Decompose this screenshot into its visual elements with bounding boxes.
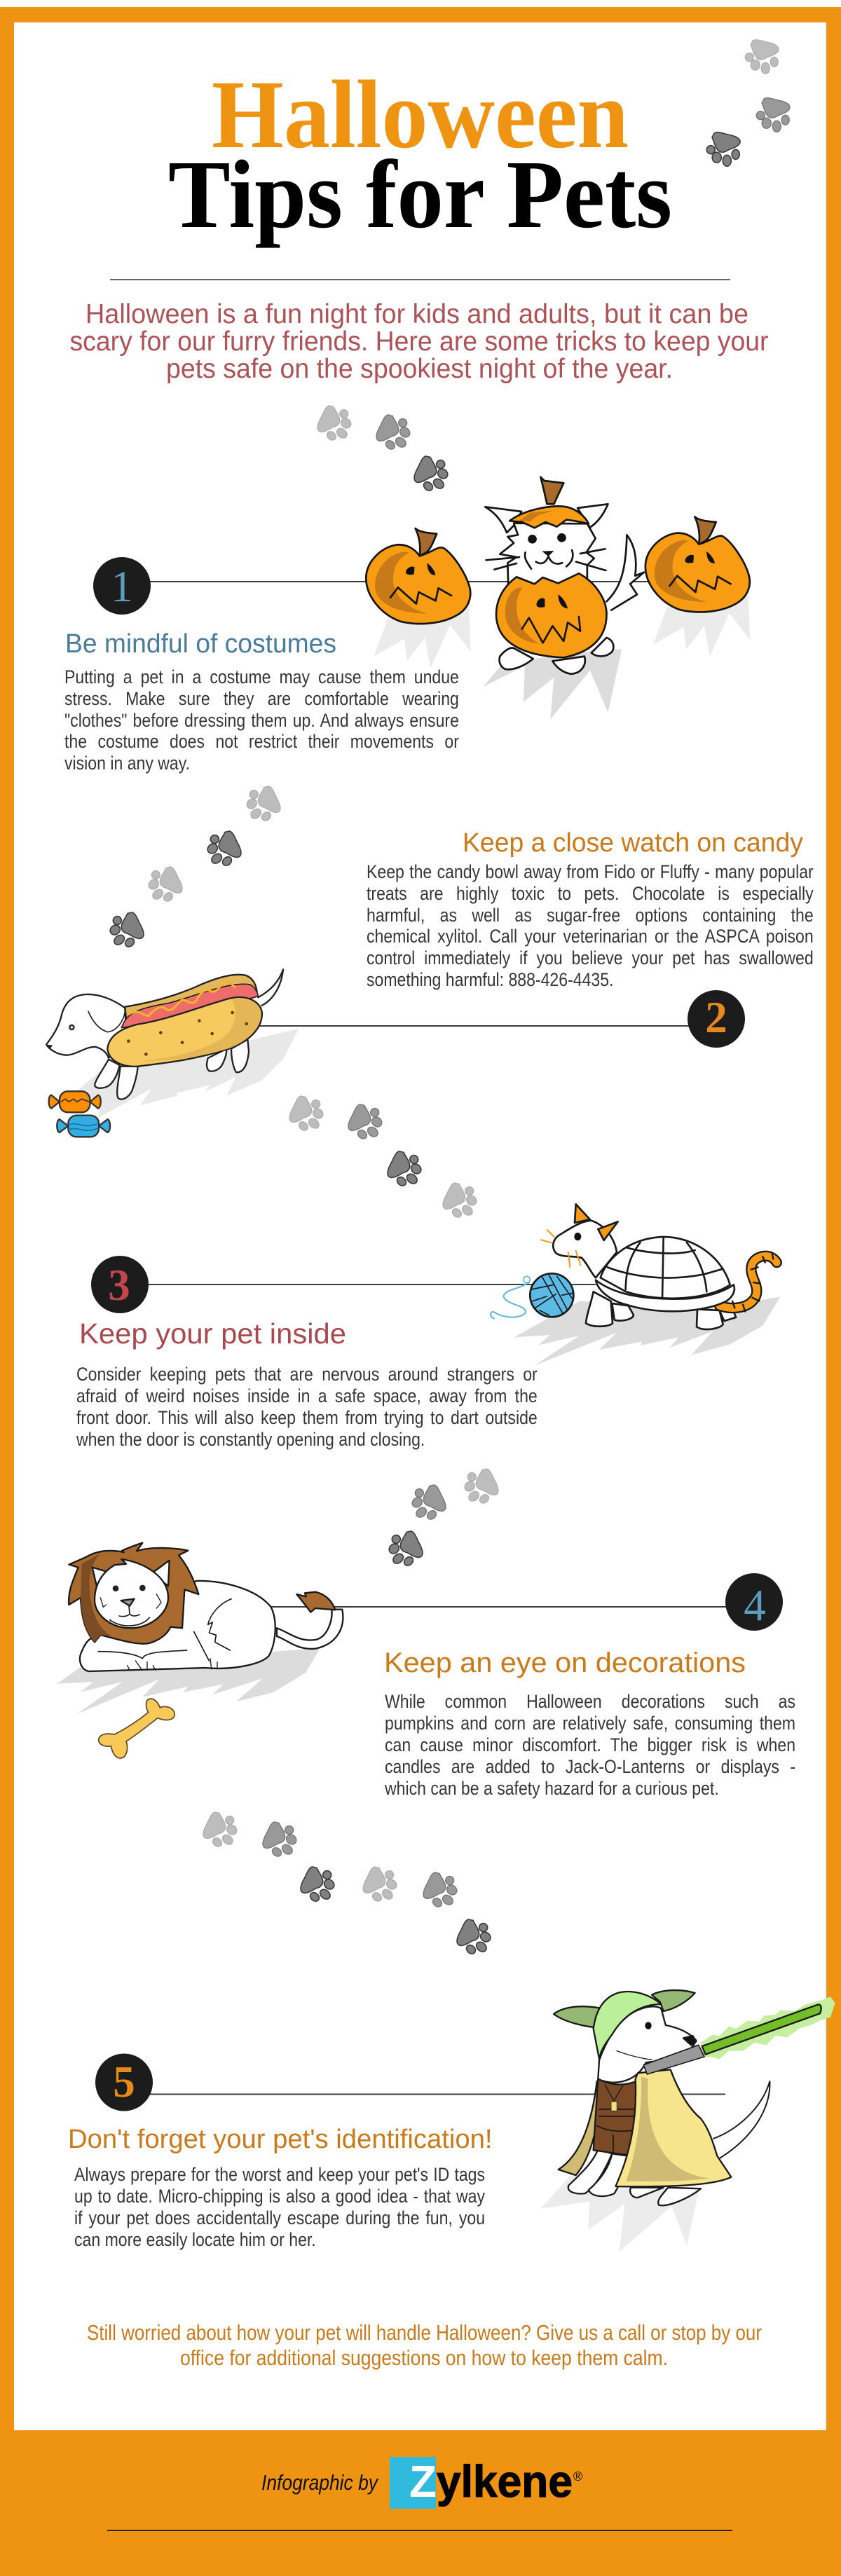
text: decorations paragraph (385, 1691, 795, 1799)
panel: section 3 keep inside (76, 1203, 782, 1450)
text: keep inside paragraph: afraid of weird noises inside in a safe space, away from the (76, 1385, 538, 1406)
panel: header (70, 61, 769, 384)
text: decorations paragraph: candles are added to Jack-O-Lanterns or displays - (385, 1756, 795, 1777)
heading: Be mindful of costumes (65, 629, 336, 659)
logo: Zylkene: ylkene (437, 2456, 573, 2507)
text: identification paragraph: up to date. Micro-chipping is also a good idea - that way (74, 2186, 485, 2207)
closing call to action: office for additional suggestions on how to keep them calm. (180, 2345, 668, 2370)
number badge 1 (93, 557, 151, 615)
text: candy paragraph: Keep the candy bowl away from Fido or Fluffy - many popular (367, 861, 814, 882)
text: costumes paragraph: stress. Make sure they are comfortable wearing (64, 688, 459, 709)
text: decorations paragraph: pumpkins and corn are relatively safe, consuming them (385, 1713, 795, 1734)
text: costumes paragraph: Putting a pet in a costume may cause them undue (64, 666, 459, 687)
closing call to action (87, 2320, 762, 2370)
heading: Don't forget your pet's identification! (68, 2125, 493, 2154)
paw prints: trail to section 2 (102, 780, 286, 954)
panel: section 4 decorations (57, 1542, 795, 1799)
text: identification paragraph: if your pet does accidentally escape during the fun, you (74, 2207, 485, 2228)
credit text: Infographic by (261, 2470, 379, 2495)
number badge 2 (688, 990, 745, 1048)
illustration: dog in jedi costume (541, 1990, 835, 2252)
title (168, 61, 672, 249)
title: Tips for Pets (168, 141, 672, 249)
text: decorations paragraph: can cause minor discomfort. The bigger risk is when (385, 1734, 795, 1755)
text: costumes paragraph: vision in any way. (64, 753, 190, 774)
number badge 5 (95, 2053, 153, 2111)
heading: Keep a close watch on candy (463, 828, 803, 858)
number badge 2: 2 (705, 993, 727, 1042)
paw prints: top corner (706, 40, 790, 166)
illustration: dog in hot dog costume (46, 969, 299, 1118)
text: identification paragraph: Always prepare for the worst and keep your pet's ID tags (74, 2164, 485, 2185)
paw prints: trail to section 5 (198, 1806, 499, 1961)
intro text: pets safe on the spookiest night of the year. (166, 354, 673, 384)
text: candy paragraph: something harmful: 888-426-4435. (367, 969, 613, 990)
heading: Keep an eye on decorations (384, 1647, 746, 1678)
paw prints: trail to section 3 (284, 1090, 485, 1224)
panel: section 5 identification (68, 1989, 835, 2252)
text: costumes paragraph: "clothes" before dressing them up. And always ensure (64, 710, 459, 731)
text: candy paragraph: treats are highly toxic to pets. Chocolate is especially (367, 883, 814, 904)
number badge 3: 3 (108, 1261, 130, 1310)
text: costumes paragraph (64, 666, 459, 774)
illustration: cat in pumpkin costume with pumpkins (366, 477, 750, 720)
text: decorations paragraph: While common Halloween decorations such as (385, 1691, 795, 1712)
text: keep inside paragraph (76, 1364, 538, 1450)
heading: Keep your pet inside (79, 1317, 346, 1350)
text: identification paragraph (74, 2164, 485, 2250)
logo: Zylkene (390, 2456, 582, 2509)
number badge 4: 4 (744, 1581, 766, 1630)
number badge 3 (91, 1256, 149, 1313)
text: keep inside paragraph: when the door is constantly opening and closing. (76, 1429, 425, 1450)
text: candy paragraph: chemical xylitol. Call your veterinarian or the ASPCA poison (367, 926, 814, 947)
intro text: Halloween is a fun night for kids and adults, but it can be (86, 299, 748, 329)
text: candy paragraph: harmful, as well as sugar-free options containing the (367, 905, 814, 926)
text: identification paragraph: can more easily locate him or her. (74, 2229, 316, 2250)
title: Halloween (212, 61, 629, 169)
panel: section 1 costumes (64, 476, 751, 774)
text: decorations paragraph: which can be a safety hazard for a curious pet. (385, 1778, 719, 1799)
paw prints: trail to section 4 (381, 1462, 504, 1573)
icon: candies (49, 1091, 110, 1137)
text: keep inside paragraph: front door. This will also keep them from trying to dart outside (76, 1407, 538, 1428)
intro text (70, 299, 769, 384)
number badge 1: 1 (111, 562, 133, 611)
text: candy paragraph (367, 861, 814, 990)
logo: Zylkene: ® (573, 2469, 582, 2483)
icon: bone (99, 1699, 175, 1758)
logo: Zylkene: Z (409, 2456, 437, 2507)
number badge 4 (725, 1573, 783, 1631)
number badge 5: 5 (113, 2057, 135, 2106)
illustration: cat in turtle costume with yarn (491, 1204, 780, 1365)
text: keep inside paragraph: Consider keeping pets that are nervous around strangers or (76, 1364, 538, 1385)
illustration: cat in lion costume (57, 1543, 343, 1714)
paw prints: trail to section 1 (312, 399, 456, 498)
text: costumes paragraph: the costume does not restrict their movements or (64, 731, 459, 752)
text: candy paragraph: control immediately if you believe your pet has swallowed (367, 947, 814, 968)
footer (107, 2456, 732, 2531)
panel: section 2 candy (45, 828, 814, 1138)
intro text: scary for our furry friends. Here are some tricks to keep your (70, 327, 769, 357)
